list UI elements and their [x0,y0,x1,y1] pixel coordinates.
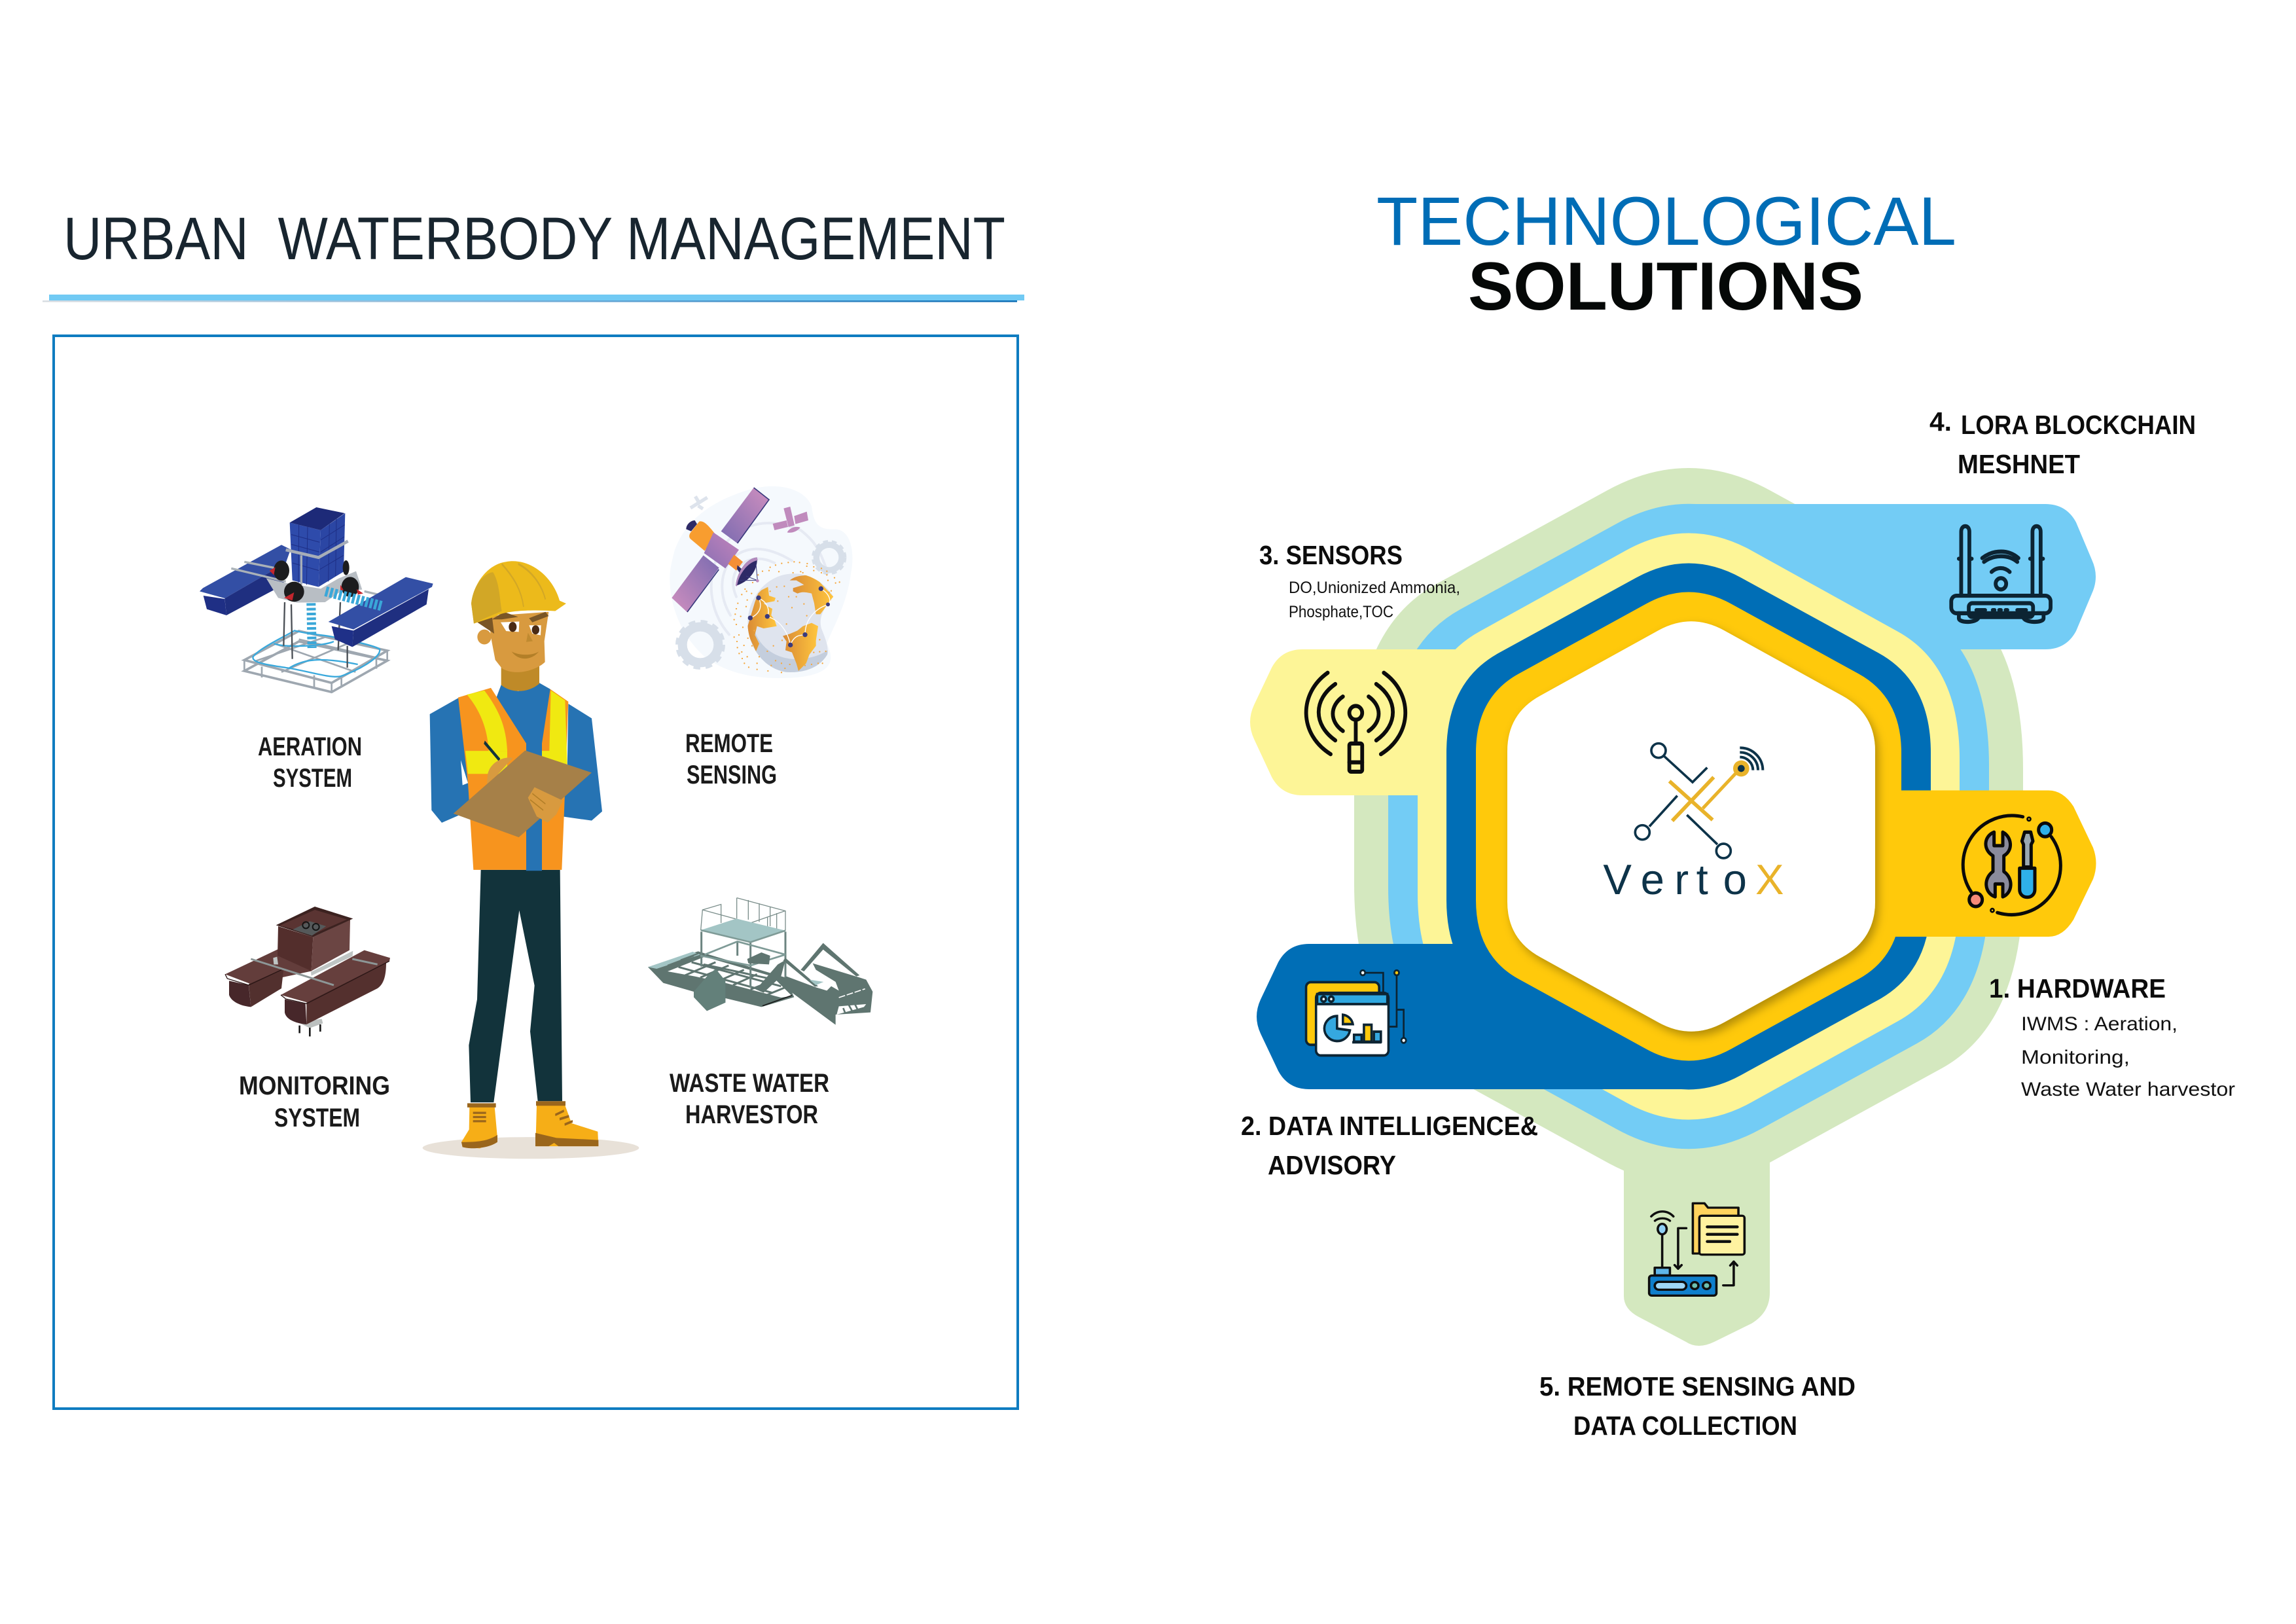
label: waste water harvestor: WASTE WATER [670,1069,829,1098]
label: monitoring system: SYSTEM [274,1104,360,1132]
label: 1 hardware: Waste Water harvestor [2021,1079,2235,1100]
label: 4 lora blockchain meshnet [1929,406,2196,479]
label: 3 sensors: DO,Unionized Ammonia, [1289,579,1460,597]
hexagon diagram [1250,468,2096,1346]
torso and arms [430,683,602,871]
label: waste water harvestor: HARVESTOR [685,1100,818,1129]
icon: wifi router [1951,526,2051,622]
label: 4 lora blockchain meshnet: LORA BLOCKCHAIN [1961,410,2196,440]
label: 1 hardware: Monitoring, [2021,1047,2130,1068]
label: 2 data intelligence and advisory [1241,1111,1538,1180]
logo: VertoX: X [1755,856,1784,903]
logo: VertoX: Verto [1603,856,1747,903]
label: 5 remote sensing and data collection [1539,1371,1856,1441]
title: technological solutions [1376,183,1956,325]
label: 5 remote sensing and data collection: DATA COLLECTION [1573,1411,1797,1441]
ring and tab: pale yellow, sensors [1250,533,1960,1119]
pencil [484,742,499,760]
illustration: aeration system [200,507,433,692]
label: 1 hardware: 1. HARDWARE [1989,973,2166,1003]
label: 3 sensors [1259,540,1460,621]
hands [487,757,563,823]
label: 2 data intelligence and advisory: 2. DATA INTELLIGENCE& [1241,1111,1538,1141]
label: 4 lora blockchain meshnet: 4. [1929,406,1952,437]
illustration: worker with clipboard [423,561,639,1159]
label: remote sensing: SENSING [687,761,777,789]
clipboard [454,751,592,837]
label: 3 sensors: Phosphate,TOC [1289,603,1393,621]
illustration: waste water harvestor [648,898,872,1025]
label: 4 lora blockchain meshnet: MESHNET [1958,449,2080,479]
label: 5 remote sensing and data collection: 5. REMOTE SENSING AND [1539,1371,1856,1401]
label: 2 data intelligence and advisory: ADVISORY [1268,1150,1396,1180]
hard hat [471,561,566,624]
icon: data dashboard [1306,970,1406,1055]
frame [54,336,1018,1409]
centre white hexagon [1507,621,1875,1032]
logo: VertoX [1603,744,1784,903]
icon: remote data exchange [1649,1203,1744,1295]
icon: signal tower [1306,673,1405,772]
title: technological solutions: SOLUTIONS [1468,249,1863,325]
illustration: remote sensing [670,486,852,678]
boots [461,1101,598,1148]
label: waste water harvestor [670,1069,829,1129]
neck and head [477,612,548,691]
ground shadow [423,1137,639,1159]
ring and tab: light blue, lora blockchain meshnet [1388,504,2096,1149]
label: 1 hardware [1989,973,2235,1100]
label: 3 sensors: 3. SENSORS [1259,540,1403,570]
ring and tab: blue, data intelligence [1257,563,1931,1089]
title: urban waterbody management: URBAN WATERBODY MANAGEMENT [63,206,1005,272]
title: technological solutions: TECHNOLOGICAL [1376,183,1956,260]
illustration: monitoring system [225,907,390,1036]
label: aeration system [258,732,362,793]
panel: urban waterbody management [43,206,1024,1409]
ring and tab: gold, hardware [1476,592,2096,1060]
title underline [43,295,1024,302]
label: aeration system: AERATION [258,732,362,761]
trousers [469,870,562,1102]
label: monitoring system: MONITORING [239,1072,390,1100]
label: aeration system: SYSTEM [273,764,352,793]
ring and tab: green, remote sensing and data collection [1354,468,2023,1346]
label: remote sensing: REMOTE [685,729,773,758]
label: remote sensing [685,729,777,789]
label: 1 hardware: IWMS : Aeration, [2021,1013,2178,1035]
panel: technological solutions [1241,183,2235,1441]
label: monitoring system [239,1072,390,1132]
icon: wrench and screwdriver [1963,816,2060,914]
